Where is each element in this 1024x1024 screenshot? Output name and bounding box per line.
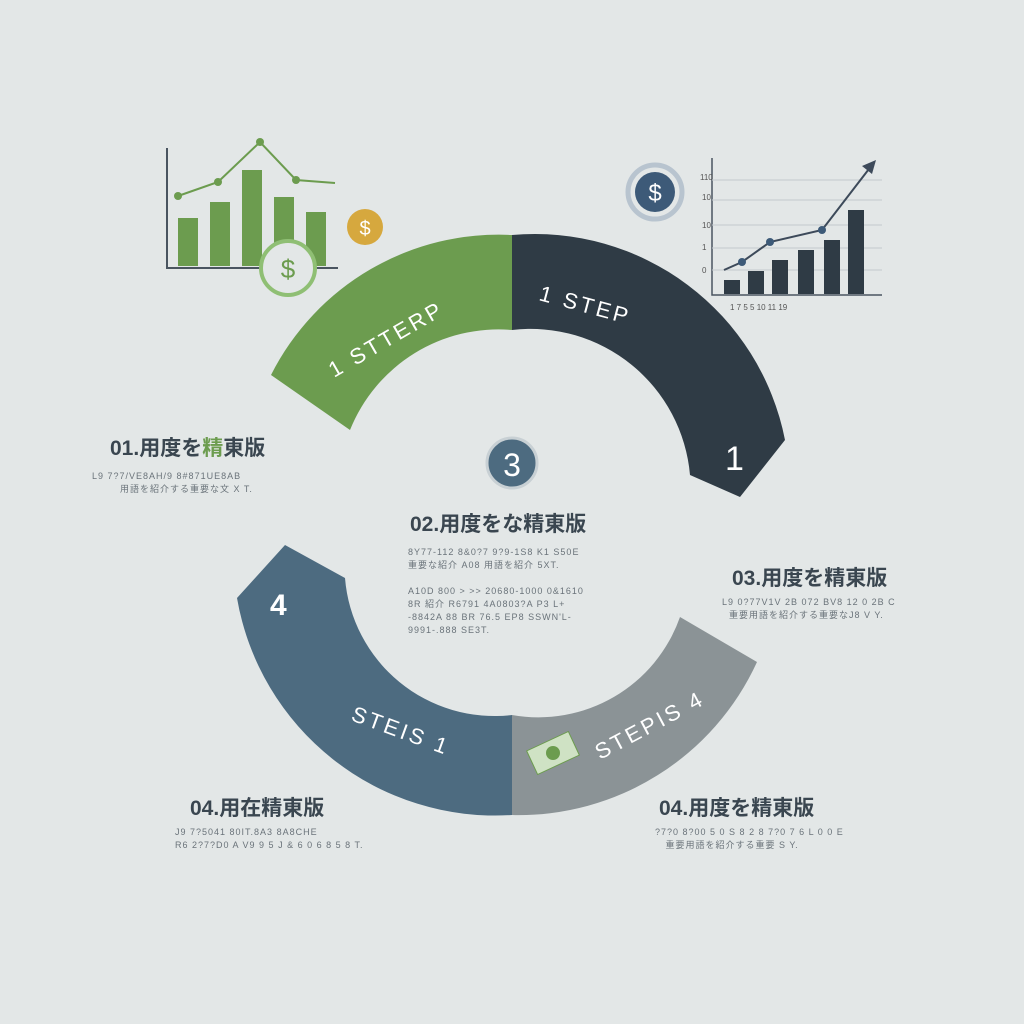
text block 02: A10D 800 > >> 20680-1000 0&1610 [408,586,584,596]
text block 03: 03.用度を精東版 [732,567,887,590]
chart: right bar chart: 110 [700,173,713,182]
text block 02: 02.用度をな精東版 [410,513,586,536]
text block 04 right [655,796,844,850]
text block 02: 8R 紹介 R6791 4A0803?A P3 L+ [408,599,565,609]
text block 03: 重要用語を紹介する重要なJ8 V Y. [729,610,884,620]
text block 04 left: J9 7?5041 80IT.8A3 8A8CHE [175,827,318,837]
segment: gray step: STEPIS 4 [591,686,709,764]
chart: left bar chart [167,138,383,295]
text block 04 left: R6 2?7?D0 A V9 9 5 J & 6 0 6 8 5 8 T. [175,840,363,850]
chart: right bar chart: $ [648,180,662,207]
segment: dark step: 1 STEP [537,281,634,329]
text: 9991-.888 SE3T. [408,625,490,635]
badge: 3 [487,438,537,488]
segment: green step [271,235,512,430]
text block 02: -8842A 88 BR 76.5 EP8 SSWN'L- [408,612,572,622]
chart: left bar chart: $ [359,218,371,240]
chart: right bar chart [628,158,882,312]
chart: right bar chart: 1 [702,243,707,252]
chart: right bar chart: 10 [702,221,711,230]
text block 03: L9 0?77V1V 2B 072 BV8 12 0 2B C [722,597,896,607]
chart: right bar chart: 1 7 5 5 10 11 19 [730,303,788,312]
text block 01: L9 7?7/VE8AH/9 8#871UE8AB [92,471,241,481]
chart: right bar chart: 10 [702,193,711,202]
text block 04 right: ?7?0 8?00 5 0 S 8 2 8 7?0 7 6 L 0 0 E [655,827,844,837]
segment: blue step: STEIS 1 [348,701,454,760]
segment: gray step [512,617,757,815]
text block 04 left [175,796,363,850]
chart: right bar chart: 0 [702,266,707,275]
text block 02: 8Y77-112 8&0?7 9?9-1S8 K1 S50E [408,547,579,557]
segment: blue step [237,545,512,816]
segment: blue step: 4 [270,589,287,622]
text block 04 right: 04.用度を精東版 [659,797,814,820]
text block 04 right: 重要用語を紹介する重要 S Y. [666,840,799,850]
segment: green step: 1 STTERP [324,296,448,382]
text block 01 [92,436,265,494]
chart: left bar chart: $ [281,254,296,284]
segment: dark step: 1 [725,440,744,478]
text block 01: 01.用度を精東版 [110,437,265,460]
badge: 3: 3 [503,447,521,483]
text block 04 left: 04.用在精東版 [190,797,324,820]
segment: dark step [512,234,785,497]
text block 02 [408,512,586,635]
text block 03 [722,566,896,620]
text block 02: 重要な紹介 A08 用語を紹介 5XT. [408,560,560,570]
text block 01: 用語を紹介する重要な文 X T. [120,484,253,494]
